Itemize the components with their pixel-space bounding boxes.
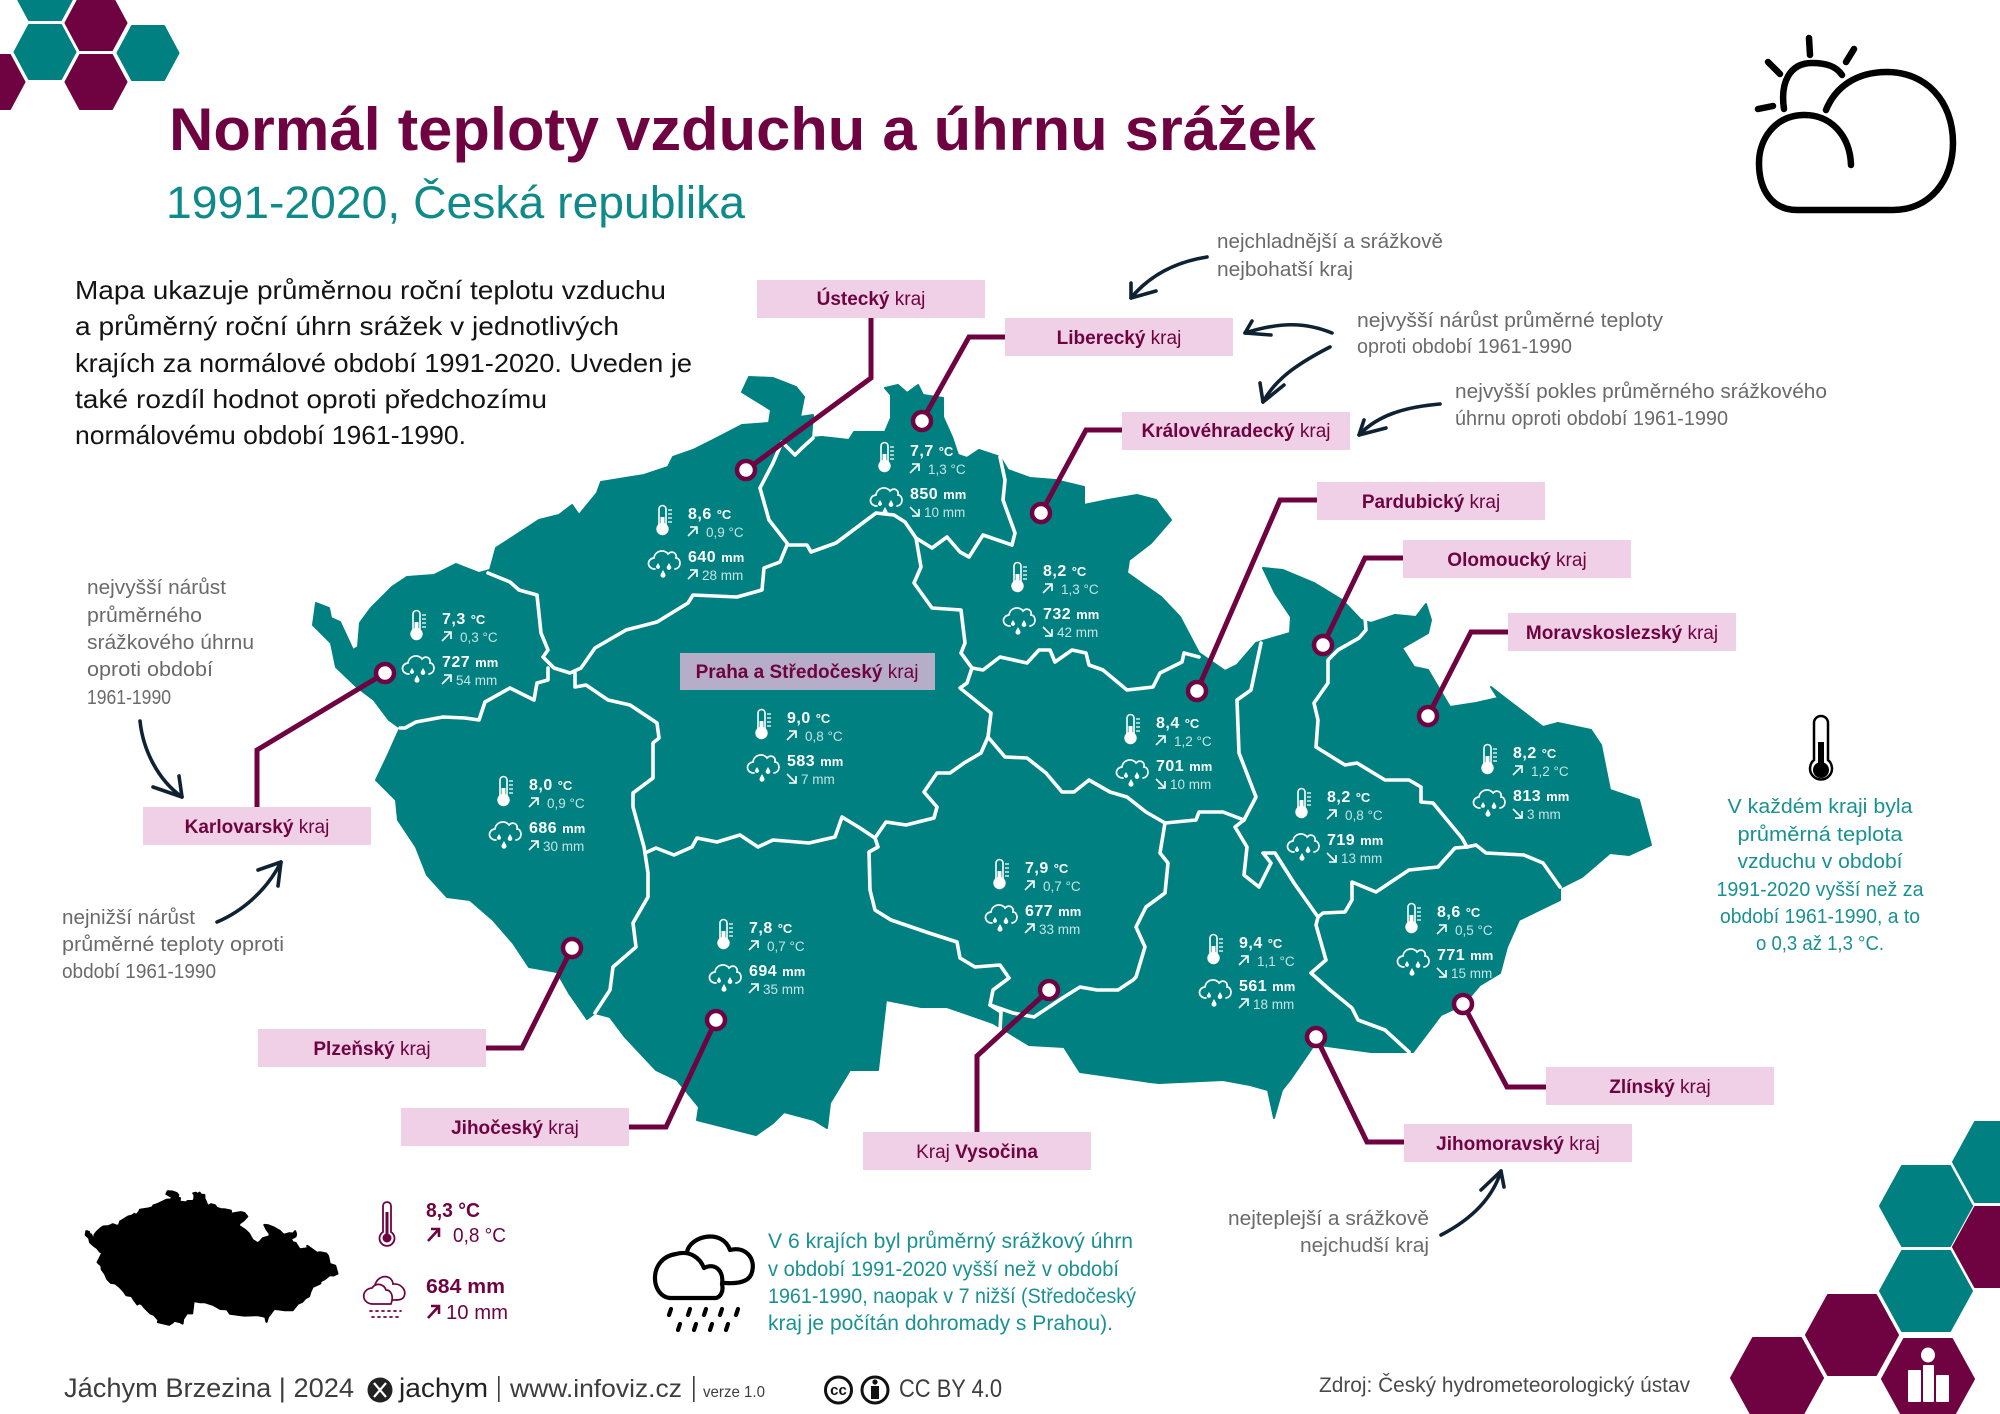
data: Praha a Středočeský — [747, 710, 843, 787]
leader line: Královéhradecký — [1032, 430, 1122, 522]
intro text: normálovému období 1961-1990. — [75, 420, 466, 450]
data: Vysočina: 0,7 °C — [1043, 879, 1081, 894]
data: Pardubický — [1116, 714, 1212, 792]
leader line: Jihočeský — [629, 1011, 725, 1127]
data: Vysočina: 7,9 °C — [1025, 860, 1069, 877]
data: Vysočina — [985, 860, 1081, 937]
icon: thermometer right — [1810, 716, 1832, 779]
data: Jihočeský: 35 mm — [763, 982, 804, 997]
subtitle: 1991-2020, Česká republika — [166, 177, 746, 228]
data: Královéhradecký: 1,3 °C — [1061, 582, 1099, 597]
icon: rain cloud national — [364, 1277, 405, 1317]
intro text — [75, 275, 692, 450]
annotation: nejvyšší nárůst teploty: oproti období 1961-1990 — [1357, 336, 1572, 358]
label: Ústecký kraj — [757, 280, 985, 318]
icon: creative commons — [826, 1377, 888, 1403]
text: temperature summary: 1991-2020 vyšší než za — [1716, 879, 1924, 901]
label: Pardubický kraj — [1317, 482, 1545, 520]
label: Praha a Středočeský kraj — [680, 653, 935, 690]
annotation: nejchladnější — [1217, 231, 1443, 281]
label: Olomoucký kraj: Olomoucký kraj — [1447, 550, 1587, 571]
intro text: krajích za normálové období 1991-2020. Uveden je — [75, 348, 692, 378]
data: Jihomoravský: 18 mm — [1253, 997, 1294, 1012]
decorative hexagons bottom right — [1731, 1122, 2000, 1414]
label: Kraj Vysočina — [863, 1132, 1091, 1170]
data: Plzeňský: 686 mm — [529, 820, 585, 837]
data: Karlovarský: 7,3 °C — [442, 611, 486, 628]
data: Zlínský: 15 mm — [1451, 966, 1492, 981]
data: Ústecký: 0,9 °C — [706, 525, 744, 540]
data: Jihočeský: 7,8 °C — [749, 920, 793, 937]
silhouette of Czechia — [86, 1191, 337, 1325]
text: precipitation summary — [768, 1230, 1136, 1335]
label: Pardubický kraj: Pardubický kraj — [1362, 492, 1500, 513]
leader line: Karlovarský — [257, 664, 394, 807]
data: Karlovarský — [402, 610, 498, 688]
text: temperature summary: průměrná teplota — [1738, 824, 1903, 846]
data: Pardubický: 10 mm — [1170, 777, 1211, 792]
data: Pardubický: 701 mm — [1156, 758, 1212, 775]
label: Moravskoslezský kraj: Moravskoslezský kraj — [1526, 623, 1718, 644]
data: Zlínský — [1397, 904, 1493, 981]
licence: CC BY 4.0 — [899, 1375, 1002, 1403]
annotation: nejvyšší nárůst srážek: průměrného — [87, 605, 202, 627]
data: Karlovarský: 727 mm — [442, 654, 498, 671]
intro text: Mapa ukazuje průměrnou roční teplotu vzduchu — [75, 275, 666, 305]
title: Normál teploty vzduchu a úhrnu srážek — [169, 96, 1317, 163]
data: Olomoucký: 8,2 °C — [1327, 789, 1371, 806]
annotation: nejchladnější: nejchladnější a srážkově — [1217, 231, 1443, 253]
arrow: to Královéhradecký from right — [1359, 404, 1440, 435]
data: Plzeňský — [489, 776, 585, 854]
annotation: nejvyšší nárůst srážek: srážkového úhrnu — [87, 632, 254, 654]
icon: clouds with rain — [655, 1237, 753, 1330]
data: Jihočeský — [709, 920, 805, 997]
data: Moravskoslezský: 813 mm — [1513, 788, 1569, 805]
label: Praha a Středočeský kraj: Praha a Středočeský kraj — [696, 662, 918, 683]
annotation: nejnižší nárůst teploty: nejnižší nárůst — [62, 907, 195, 929]
footer: credits: verze 1.0 — [703, 1384, 765, 1401]
arrow: to Karlovarský from below — [217, 862, 281, 922]
national precipitation — [426, 1276, 508, 1324]
national temperature — [426, 1200, 506, 1247]
data: Královéhradecký: 732 mm — [1043, 606, 1099, 623]
data: Vysočina: 677 mm — [1025, 903, 1081, 920]
annotation: nejteplejší — [1228, 1208, 1429, 1257]
icon: infoviz logo — [1908, 1348, 1949, 1402]
annotation: nejvyšší nárůst srážek: nejvyšší nárůst — [87, 577, 226, 599]
national temperature: 0,8 °C — [453, 1225, 506, 1247]
data: Liberecký: 10 mm — [924, 505, 965, 520]
text: temperature summary: o 0,3 až 1,3 °C. — [1756, 933, 1884, 955]
data: Zlínský: 8,6 °C — [1437, 904, 1481, 921]
data: Moravskoslezský: 8,2 °C — [1513, 745, 1557, 762]
label: Olomoucký kraj — [1403, 540, 1631, 578]
data: Plzeňský: 8,0 °C — [529, 777, 573, 794]
label: Karlovarský kraj — [143, 807, 371, 845]
annotation: nejvyšší nárůst teploty: nejvyšší nárůst průměrné teploty — [1357, 310, 1663, 332]
data: Ústecký: 8,6 °C — [688, 506, 732, 523]
footer: credits: Jáchym Brzezina | 2024 — [64, 1373, 354, 1403]
leader line: Moravskoslezský — [1419, 632, 1508, 725]
data: Jihomoravský: 561 mm — [1239, 978, 1295, 995]
leader line: Olomoucký — [1314, 558, 1403, 654]
arrow: to Liberecký from right — [1245, 321, 1332, 335]
label: Královéhradecký kraj — [1122, 412, 1350, 450]
data: Olomoucký — [1287, 788, 1383, 866]
data: Ústecký: 28 mm — [702, 568, 743, 583]
data: Plzeňský: 0,9 °C — [547, 796, 585, 811]
data: Olomoucký: 13 mm — [1341, 851, 1382, 866]
annotation: nejchladnější: nejbohatší kraj — [1217, 259, 1353, 281]
intro text: a průměrný roční úhrn srážek v jednotlivých — [75, 311, 619, 341]
data: Jihočeský: 694 mm — [749, 963, 805, 980]
map of Czech regions — [313, 377, 1651, 1135]
intro text: také rozdíl hodnot oproti předchozímu — [75, 384, 547, 414]
arrow: to Liberecký from above — [1131, 257, 1207, 298]
data: Liberecký — [870, 442, 966, 520]
annotation: nejteplejší: nejchudší kraj — [1300, 1235, 1429, 1257]
label: Karlovarský kraj: Karlovarský kraj — [185, 817, 329, 838]
text: temperature summary: vzduchu v období — [1738, 851, 1903, 873]
data: Praha a Středočeský: 583 mm — [787, 753, 843, 770]
data: Liberecký: 1,3 °C — [928, 462, 966, 477]
arrow: to Jihomoravský — [1441, 1171, 1504, 1235]
text: precipitation summary: kraj je počítán dohromady s Prahou). — [768, 1312, 1113, 1335]
data: Královéhradecký — [1003, 562, 1099, 640]
text: temperature summary: V každém kraji byla — [1728, 796, 1913, 818]
annotation: nejvyšší pokles srážek — [1455, 381, 1827, 430]
data: Moravskoslezský: 3 mm — [1527, 807, 1561, 822]
leader line: Liberecký — [913, 337, 1005, 430]
data: Liberecký: 7,7 °C — [910, 443, 954, 460]
data: Olomoucký: 0,8 °C — [1345, 808, 1383, 823]
annotation: nejnižší nárůst teploty: průměrné teploty oproti — [62, 934, 284, 956]
data: Olomoucký: 719 mm — [1327, 832, 1383, 849]
data: Jihomoravský: 9,4 °C — [1239, 935, 1283, 952]
leader line: Zlínský — [1454, 995, 1546, 1087]
arrow: to Karlovarský from above — [140, 721, 182, 797]
text: precipitation summary: v období 1991-2020 vyšší než v období — [768, 1258, 1119, 1281]
data: Královéhradecký: 8,2 °C — [1043, 563, 1087, 580]
footer: credits: www.infoviz.cz — [509, 1375, 682, 1403]
data: Pardubický: 1,2 °C — [1174, 734, 1212, 749]
leader line: Plzeňský — [486, 939, 581, 1048]
label: Ústecký kraj: Ústecký kraj — [817, 288, 925, 310]
data: Moravskoslezský: 1,2 °C — [1531, 764, 1569, 779]
data: Praha a Středočeský: 9,0 °C — [787, 710, 831, 727]
data: Praha a Středočeský: 7 mm — [801, 772, 835, 787]
data: Ústecký — [648, 506, 744, 583]
data: Zlínský: 0,5 °C — [1455, 923, 1493, 938]
data: Ústecký: 640 mm — [688, 549, 744, 566]
icon: creative commons: cc — [830, 1382, 847, 1399]
label: Jihomoravský kraj — [1404, 1124, 1632, 1162]
label: Liberecký kraj — [1005, 318, 1233, 356]
data: Liberecký: 850 mm — [910, 486, 966, 503]
arrow: to Královéhradecký from above — [1260, 347, 1330, 402]
data: Jihomoravský: 1,1 °C — [1257, 954, 1295, 969]
national temperature: 8,3 °C — [426, 1200, 480, 1222]
leader line: Ústecký — [737, 317, 871, 479]
annotation: nejvyšší nárůst srážek — [87, 577, 254, 709]
annotation: nejvyšší nárůst srážek: 1961-1990 — [87, 687, 171, 709]
label: Jihomoravský kraj: Jihomoravský kraj — [1436, 1134, 1600, 1155]
data: Praha a Středočeský: 0,8 °C — [805, 729, 843, 744]
leader line: Pardubický — [1188, 500, 1317, 700]
label: Zlínský kraj — [1546, 1067, 1774, 1105]
annotation: nejvyšší pokles srážek: úhrnu oproti období 1961-1990 — [1455, 408, 1728, 430]
data: Jihočeský: 0,7 °C — [767, 939, 805, 954]
data: Vysočina: 33 mm — [1039, 922, 1080, 937]
data: Královéhradecký: 42 mm — [1057, 625, 1098, 640]
annotation: nejnižší nárůst teploty: období 1961-1990 — [62, 961, 216, 983]
label: Jihočeský kraj — [401, 1108, 629, 1146]
data: Plzeňský: 30 mm — [543, 839, 584, 854]
data: Karlovarský: 54 mm — [456, 673, 497, 688]
national precipitation: 684 mm — [426, 1276, 505, 1298]
annotation: nejvyšší pokles srážek: nejvyšší pokles průměrného srážkového — [1455, 381, 1827, 403]
label: Moravskoslezský kraj — [1508, 613, 1736, 651]
decorative hexagons top left — [0, 0, 178, 109]
text: temperature summary — [1716, 796, 1924, 955]
icon: sun behind cloud — [1758, 38, 1953, 210]
national precipitation: 10 mm — [446, 1302, 508, 1324]
data: Karlovarský: 0,3 °C — [460, 630, 498, 645]
leader line: Vysočina — [977, 981, 1058, 1132]
annotation: nejvyšší nárůst teploty — [1357, 310, 1663, 358]
footer: credits — [64, 1373, 765, 1403]
label: Plzeňský kraj: Plzeňský kraj — [313, 1039, 431, 1060]
icon: thermometer national — [380, 1202, 394, 1246]
leader line: Jihomoravský — [1307, 1028, 1404, 1142]
label: Jihočeský kraj: Jihočeský kraj — [451, 1118, 579, 1139]
annotation: nejvyšší nárůst srážek: oproti období — [87, 659, 213, 681]
label: Zlínský kraj: Zlínský kraj — [1609, 1077, 1711, 1098]
text: precipitation summary: 1961-1990, naopak v 7 nižší (Středočeský — [768, 1285, 1136, 1308]
source: Zdroj: Český hydrometeorologický ústav — [1319, 1374, 1690, 1397]
data: Zlínský: 771 mm — [1437, 947, 1493, 964]
label: Plzeňský kraj — [258, 1029, 486, 1067]
text: precipitation summary: V 6 krajích byl průměrný srážkový úhrn — [768, 1230, 1133, 1253]
footer: credits: jachym — [398, 1373, 488, 1403]
data: Jihomoravský — [1199, 934, 1295, 1012]
label: Liberecký kraj: Liberecký kraj — [1057, 328, 1181, 349]
data: Moravskoslezský — [1473, 744, 1569, 822]
data: Pardubický: 8,4 °C — [1156, 715, 1200, 732]
text: temperature summary: období 1961-1990, a to — [1720, 906, 1920, 928]
label: Královéhradecký kraj: Královéhradecký kraj — [1141, 421, 1331, 442]
label: Kraj Vysočina: Kraj Vysočina — [916, 1142, 1038, 1163]
annotation: nejnižší nárůst teploty — [62, 907, 284, 983]
annotation: nejteplejší: nejteplejší a srážkově — [1228, 1208, 1429, 1230]
